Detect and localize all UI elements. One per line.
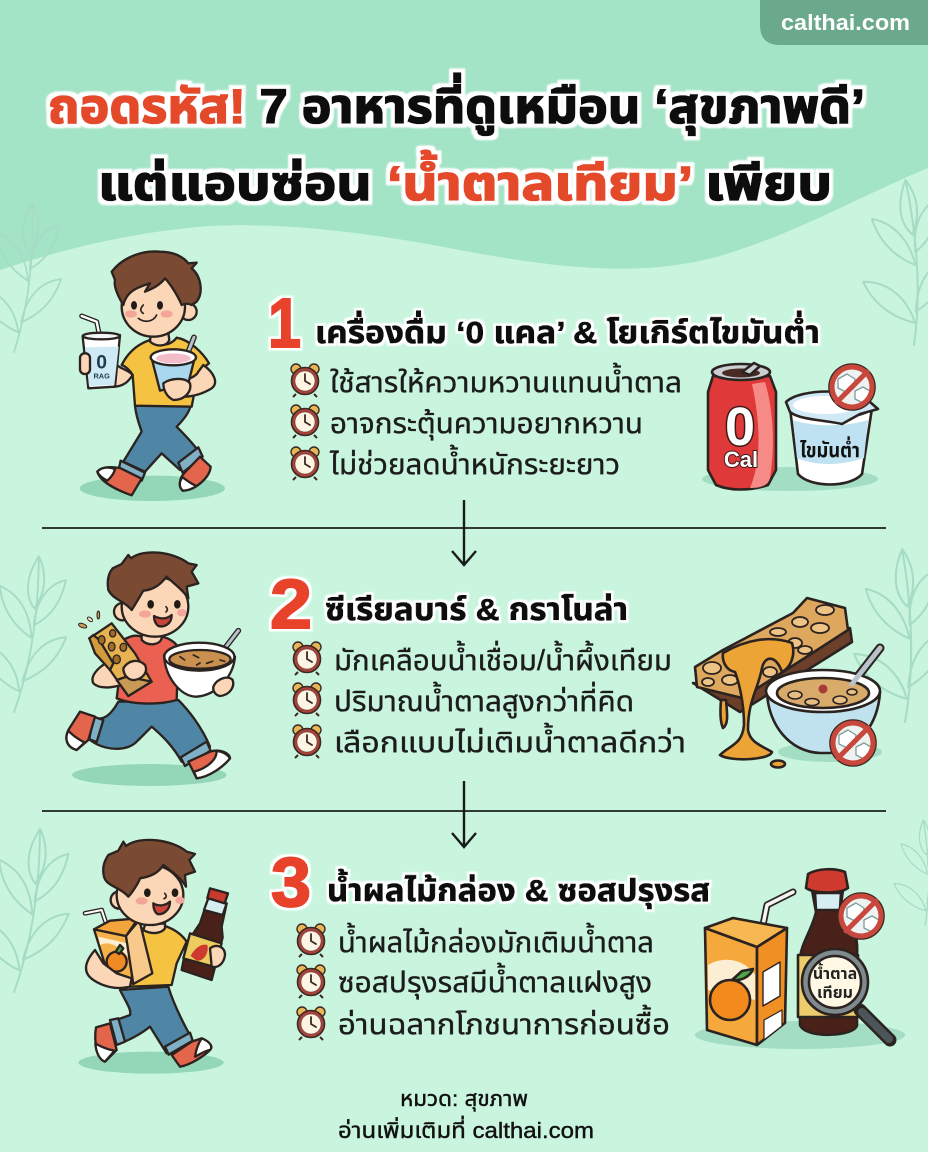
section 3 bullets xyxy=(297,922,670,1041)
arrow 1 xyxy=(452,500,476,565)
section 1 food: soda can and yogurt: Cal xyxy=(724,447,758,472)
section 1 character: boy with drink and yogurt xyxy=(80,251,225,501)
section 3 number: 3 xyxy=(271,843,311,921)
section 3 character: boy with juice box and sauce bottle xyxy=(78,840,228,1074)
title xyxy=(48,73,865,211)
section 1 bullets: ไม่ช่วยลดน้ำหนักระยะยาว xyxy=(329,444,620,481)
section 3 bullets: น้ำผลไม้กล่องมักเติมน้ำตาล xyxy=(338,922,654,959)
section 1 heading: เครื่องดื่ม ‘0 แคล’ & โยเกิร์ตไขมันต่ำ xyxy=(315,310,820,350)
header wave xyxy=(0,0,928,270)
footer category: หมวด: สุขภาพ xyxy=(400,1088,528,1112)
site badge: calthai.com xyxy=(781,10,910,35)
decorative leaves xyxy=(0,176,928,997)
section 2 bullets: ปริมาณน้ำตาลสูงกว่าที่คิด xyxy=(334,681,634,719)
divider 2 xyxy=(42,810,886,812)
site badge xyxy=(760,0,928,45)
section 2 heading: ซีเรียลบาร์ & กราโนล่า xyxy=(325,592,628,627)
title: ถอดรหัส! 7 อาหารที่ดูเหมือน ‘สุขภาพดี’ xyxy=(48,73,865,136)
section 1 number: 1 xyxy=(268,284,301,362)
section 3 heading: น้ำผลไม้กล่อง & ซอสปรุงรส xyxy=(327,868,710,909)
section 1 bullets: อาจกระตุ้นความอยากหวาน xyxy=(330,408,643,440)
section 1 character: boy with drink and yogurt: 0 xyxy=(96,352,107,373)
divider 1 xyxy=(42,527,886,529)
section 2 number: 2 xyxy=(270,565,312,643)
section 3 food: juice box and sauce bottle: เทียม xyxy=(817,985,853,1002)
section 3 bullets: ซอสปรุงรสมีน้ำตาลแฝงสูง xyxy=(338,962,652,1000)
title: แต่แอบซ่อน ‘น้ำตาลเทียม’ เพียบ xyxy=(98,150,832,211)
section 3 food: juice box and sauce bottle xyxy=(695,869,905,1049)
section 1 food: soda can and yogurt xyxy=(702,363,878,491)
section 2 bullets: มักเคลือบน้ำเชื่อม/น้ำผึ้งเทียม xyxy=(334,640,672,677)
section 2 bullets: เลือกแบบไม่เติมน้ำตาลดีกว่า xyxy=(334,722,686,759)
arrow 2 xyxy=(452,781,476,847)
section 1 character: boy with drink and yogurt: RAG xyxy=(94,372,110,381)
section 3 food: juice box and sauce bottle: น้ำตาล xyxy=(813,962,857,983)
section 1 bullets xyxy=(291,362,682,481)
section 1 bullets: ใช้สารให้ความหวานแทนน้ำตาล xyxy=(330,362,682,399)
section 2 bullets xyxy=(293,640,686,759)
section 2 character: boy with granola bar and bowl xyxy=(66,552,238,786)
section 3 bullets: อ่านฉลากโภชนาการก่อนซื้อ xyxy=(338,1004,670,1041)
section 1 food: soda can and yogurt: 0 xyxy=(725,397,755,457)
section 1 food: soda can and yogurt: ไขมันต่ำ xyxy=(800,436,860,462)
section 2 food: granola bar and bowl xyxy=(693,598,882,768)
footer link: อ่านเพิ่มเติมที่ calthai.com xyxy=(338,1115,594,1143)
